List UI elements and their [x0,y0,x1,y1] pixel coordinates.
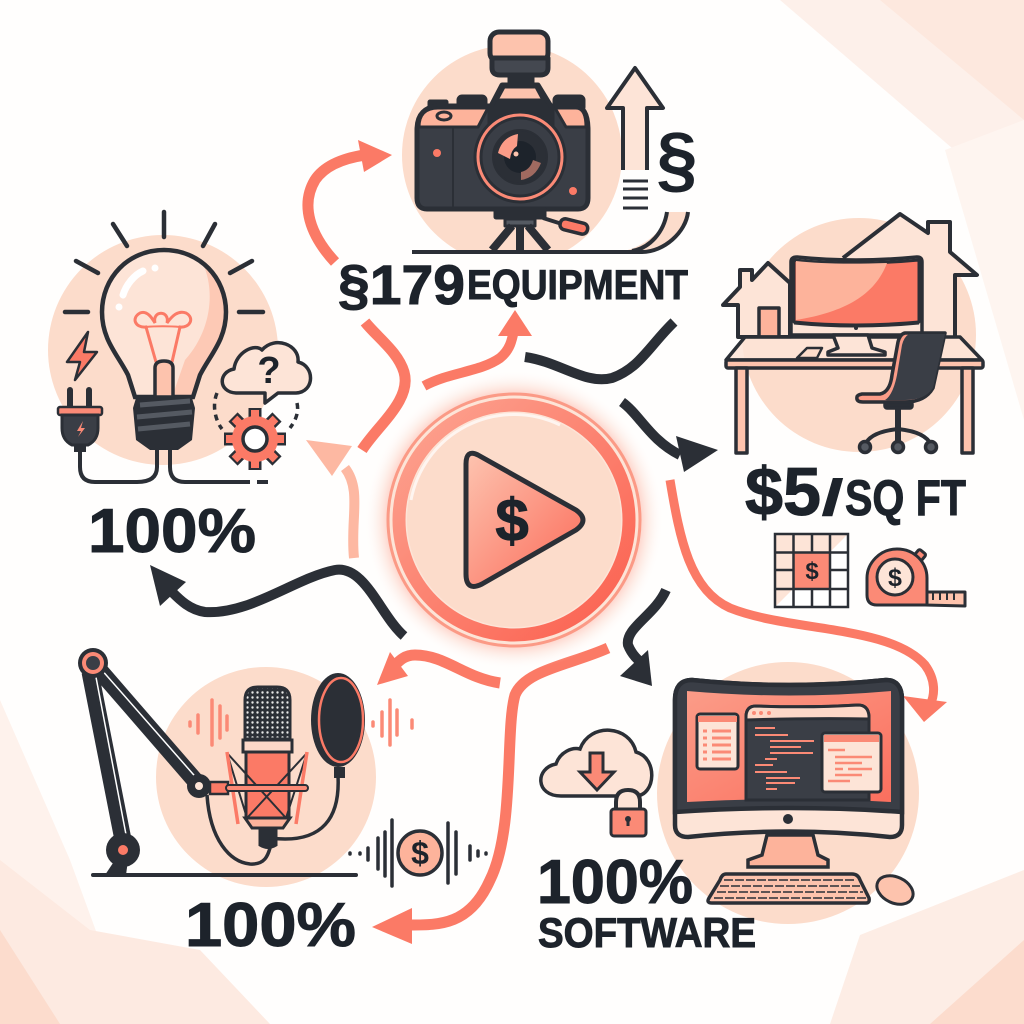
icon: pop filter [311,673,365,778]
heading: $5/sq ft: SQ FT [845,470,966,526]
icon: plug and cord [58,390,268,482]
arrow: coral to camera [308,140,405,450]
icon: microphone [226,687,308,848]
icon: bolt [67,332,97,380]
arrow: coral to software [670,480,947,722]
baseline and swoosh [617,212,688,252]
heading: 100%: 100% [88,497,256,566]
panel: §179 equipment [338,32,698,316]
panel: microphone 100% [78,648,486,960]
icon: play with dollar [466,453,583,586]
icon: houses [723,214,977,337]
heading: $5/sq ft: $5 [745,454,821,530]
arrow: dark down to monitor [620,590,666,686]
arrow: dark top right wave [525,322,674,379]
icon: cloud with question [222,343,311,403]
heading: $5/sq ft: / [822,470,843,526]
heading: 100%: 100% [185,891,356,960]
heading: §179 equipment: §179 [338,253,465,316]
arrows: flow from centre to each deduction [150,140,947,944]
icon: dollar waveform: $ [411,835,429,871]
heading: 100% software: SOFTWARE [538,909,756,956]
icon: up arrow [607,68,663,170]
arrow: dark to bulb label [150,565,404,636]
icon: desk [726,335,983,453]
arrow: coral long to mic label [372,648,608,944]
arrow: dark to home office [622,402,718,472]
heading: $5/sq ft [745,454,966,530]
arrow: coral to mic [377,652,500,685]
heading: 100% software: 100% [537,848,693,917]
icon: monitor [675,680,902,867]
panel: home office $5/sq ft [723,214,983,607]
icon: monitor [791,257,922,355]
icon: tape measure [867,549,965,606]
central play button [364,370,664,670]
panel: software 100% [537,662,919,956]
heading: §179 equipment: EQUIPMENT [467,261,688,308]
icon: floor grid [775,534,848,607]
icon: sound waves coral [190,700,412,745]
icon: camera [417,32,589,250]
arrow: peach to bulb [306,440,354,558]
icon: chair [857,333,945,452]
heading: 100% software [537,848,756,956]
icon: gear [224,408,286,470]
code lines [755,728,814,789]
icon: floor grid: $ [805,558,819,585]
heading: §179 equipment [338,253,688,316]
icon: keyboard [708,874,869,903]
icon: padlock [611,790,646,836]
icon: section sign: § [656,117,698,200]
arrow: coral up to equipment label [424,310,532,386]
icon: dollar waveform [350,820,486,886]
icon: tape measure: $ [888,564,902,592]
icon: cloud with question: ? [257,350,281,392]
icon: rays [65,212,263,312]
icon: mouse [872,870,918,910]
panel: lightbulb 100% [48,212,311,566]
icon: bulb [102,250,228,450]
icon: play with dollar: $ [495,487,529,554]
icon: cloud download [541,730,652,796]
icon: boom arm [78,648,228,875]
lines [623,181,648,208]
